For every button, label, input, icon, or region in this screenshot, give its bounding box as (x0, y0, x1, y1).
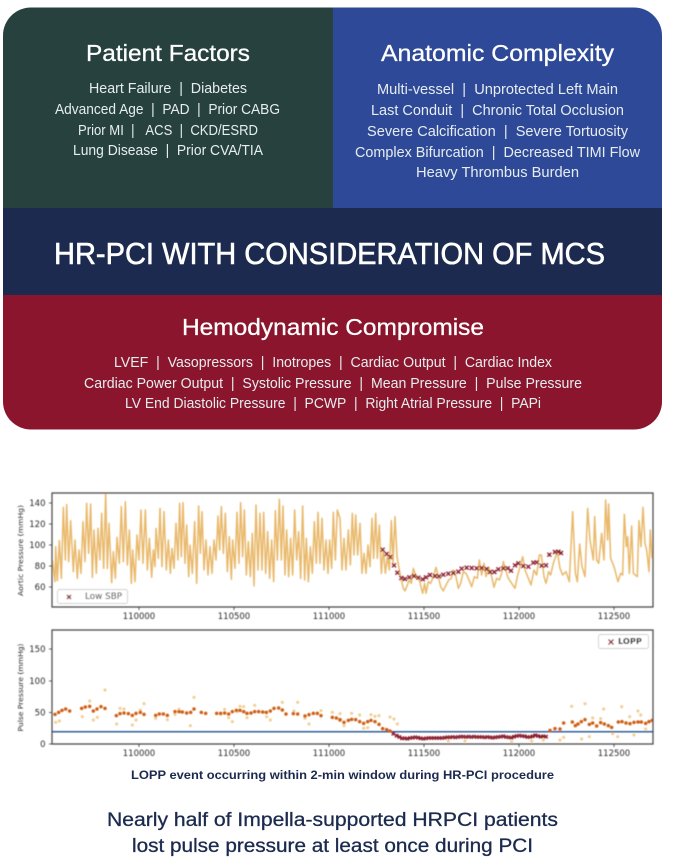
chart frame: pulse pressure (52, 630, 653, 744)
legend: low SBP: Low SBP (85, 592, 122, 602)
legend: LOPP: LOPP (618, 636, 642, 646)
text block: patient factors list: Advanced Age | PAD | Prior CABG (55, 102, 280, 118)
dots: raw pulse pressure, right section (340, 704, 646, 742)
heading: HR-PCI banner title: HR-PCI WITH CONSIDERATION OF MCS (54, 236, 605, 271)
line: aortic pressure trace, right section (340, 500, 653, 593)
axis: pulse pressure x ticks: 112500 (598, 749, 630, 759)
heading: hemodynamic compromise: Hemodynamic Compromise (182, 314, 484, 340)
takeaway text (107, 809, 558, 857)
panel: anatomic complexity (333, 7, 663, 208)
panel: central banner (3, 208, 663, 295)
panel: patient factors (3, 7, 333, 208)
panel: risk factor card (3, 7, 663, 430)
axis: pulse pressure x ticks (123, 744, 630, 759)
axis: aortic pressure x ticks: 112500 (598, 612, 630, 622)
heading: anatomic complexity: Anatomic Complexity (381, 40, 615, 66)
text block: patient factors list (55, 81, 280, 159)
caption: LOPP event: LOPP event occurring within 2-min window during HR-PCI procedure (131, 768, 554, 782)
text block: anatomic complexity list: Heavy Thrombus Burden (416, 165, 579, 181)
axis: aortic pressure y ticks: 60 (35, 583, 46, 593)
axis: aortic pressure y ticks: 80 (35, 562, 46, 572)
legend: low SBP (58, 590, 128, 604)
axis: aortic pressure x ticks: 111000 (313, 612, 345, 622)
axis: aortic pressure x ticks: 110000 (123, 612, 155, 622)
panel: hemodynamic compromise (3, 295, 663, 430)
chart: aortic pressure (16, 493, 653, 759)
chart frame: aortic pressure (52, 493, 653, 607)
axis: aortic pressure x ticks: 112000 (503, 612, 535, 622)
line: aortic pressure trace, left section (52, 493, 340, 586)
axis: aortic pressure y label: Aortic Pressure (mmHg) (16, 505, 25, 596)
axis: aortic pressure y ticks: 100 (29, 541, 46, 551)
axis: aortic pressure x ticks: 111500 (408, 612, 440, 622)
heading: patient factors: Patient Factors (86, 40, 250, 66)
axis: pulse pressure x ticks: 110000 (123, 749, 155, 759)
axis: aortic pressure x ticks (123, 607, 630, 622)
axis: pulse pressure y ticks: 100 (29, 677, 46, 687)
dots: mean pulse pressure, right section (340, 719, 652, 731)
takeaway text: lost pulse pressure at least once during PCI (132, 835, 533, 857)
text block: hemodynamic compromise list: Cardiac Power Output | Systolic Pressure | Mean Pressure | Pulse Pressure (84, 376, 582, 392)
axis: pulse pressure x ticks: 111500 (408, 749, 440, 759)
text block: anatomic complexity list: Last Conduit | Chronic Total Occlusion (371, 103, 624, 119)
text block: hemodynamic compromise list: LVEF | Vasopressors | Inotropes | Cardiac Output | Cardiac Index (114, 355, 553, 371)
text block: patient factors list: Heart Failure | Diabetes (89, 81, 247, 97)
axis: pulse pressure y label: Pulse Pressure (mmHg) (16, 643, 25, 732)
axis: aortic pressure y ticks: 120 (29, 520, 46, 530)
text block: anatomic complexity list: Complex Bifurcation | Decreased TIMI Flow (355, 145, 641, 161)
chart: pulse pressure (52, 690, 653, 742)
axis: pulse pressure y ticks (29, 645, 52, 750)
markers: LOPP crosses (392, 732, 548, 740)
axis: pulse pressure x ticks: 110500 (218, 749, 250, 759)
axis: pulse pressure x ticks: 112000 (503, 749, 535, 759)
text block: anatomic complexity list (355, 82, 641, 181)
axis: aortic pressure y ticks (29, 499, 52, 593)
threshold line at 20 mmHg (52, 731, 653, 733)
takeaway text: Nearly half of Impella-supported HRPCI patients (107, 809, 558, 831)
axis: pulse pressure y ticks: 0 (40, 740, 46, 750)
text block: patient factors list: Lung Disease | Prior CVA/TIA (73, 143, 263, 159)
dots: mean pulse pressure, left section (55, 706, 340, 720)
text block: hemodynamic compromise list (84, 355, 582, 412)
text block: hemodynamic compromise list: LV End Diastolic Pressure | PCWP | Right Atrial Pressure | PAPi (125, 396, 541, 412)
axis: aortic pressure x ticks: 110500 (218, 612, 250, 622)
axis: aortic pressure y ticks: 140 (29, 499, 46, 509)
axis: pulse pressure x ticks: 111000 (313, 749, 345, 759)
axis: pulse pressure y ticks: 150 (29, 645, 46, 655)
text block: patient factors list: Prior MI | ACS | CKD/ESRD (78, 123, 258, 139)
legend: LOPP (598, 634, 648, 648)
text block: anatomic complexity list: Multi-vessel | Unprotected Left Main (377, 82, 618, 98)
markers: low SBP crosses (381, 548, 563, 581)
text block: anatomic complexity list: Severe Calcification | Severe Tortuosity (367, 124, 629, 140)
dots: raw pulse pressure, left section (56, 690, 332, 726)
axis: pulse pressure y ticks: 50 (35, 708, 46, 718)
